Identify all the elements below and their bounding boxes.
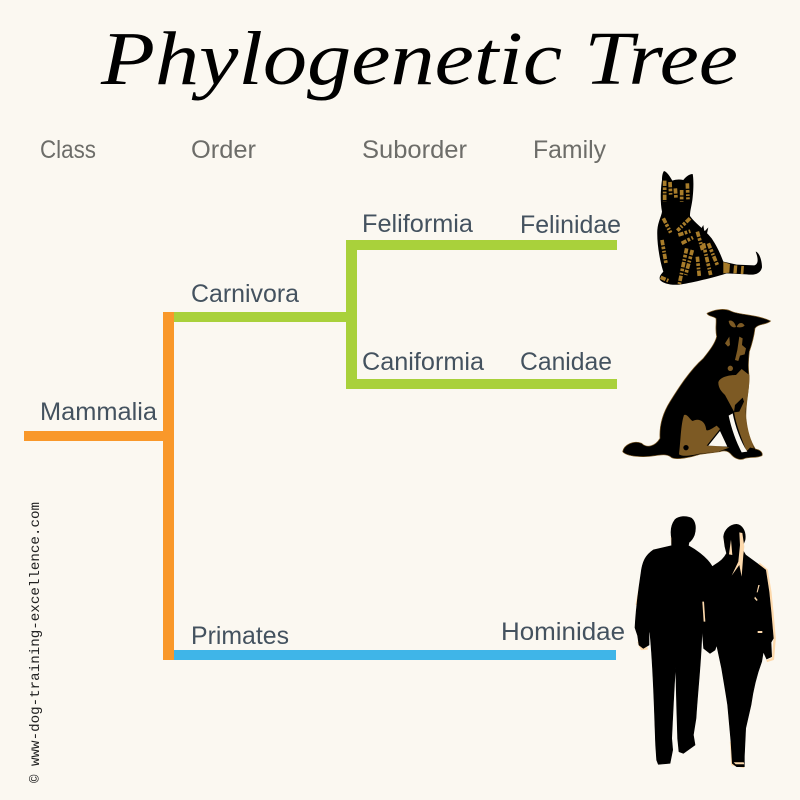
taxon labels: Caniformia [362, 348, 484, 376]
taxon labels: Felinidae [520, 211, 621, 239]
skin highlights [637, 537, 775, 767]
column headings: Suborder [362, 136, 467, 164]
taxon labels: Feliformia [362, 210, 473, 238]
column headings: Class [40, 136, 96, 164]
taxon labels [40, 210, 625, 650]
taxon labels: Mammalia [40, 398, 157, 426]
icon: dog silhouette [623, 309, 771, 459]
title: Phylogenetic Tree [100, 17, 738, 101]
column headings: Family [533, 136, 606, 164]
taxon labels: Canidae [520, 348, 612, 376]
hair strands and highlights [702, 532, 762, 764]
tree: primates branch [174, 650, 616, 660]
watermark: © www-dog-training-excellence.com [28, 502, 44, 783]
icon: cat silhouette [657, 171, 762, 285]
column headings [40, 136, 606, 164]
man [635, 517, 714, 764]
icon: human couple silhouette [635, 517, 775, 767]
tree: mammalia branches [24, 312, 174, 660]
woman [702, 524, 773, 767]
tree: carnivora branches [174, 240, 617, 389]
taxon labels: Hominidae [501, 618, 625, 646]
taxon labels: Primates [191, 622, 289, 650]
taxon labels: Carnivora [191, 280, 299, 308]
column headings: Order [191, 136, 256, 164]
